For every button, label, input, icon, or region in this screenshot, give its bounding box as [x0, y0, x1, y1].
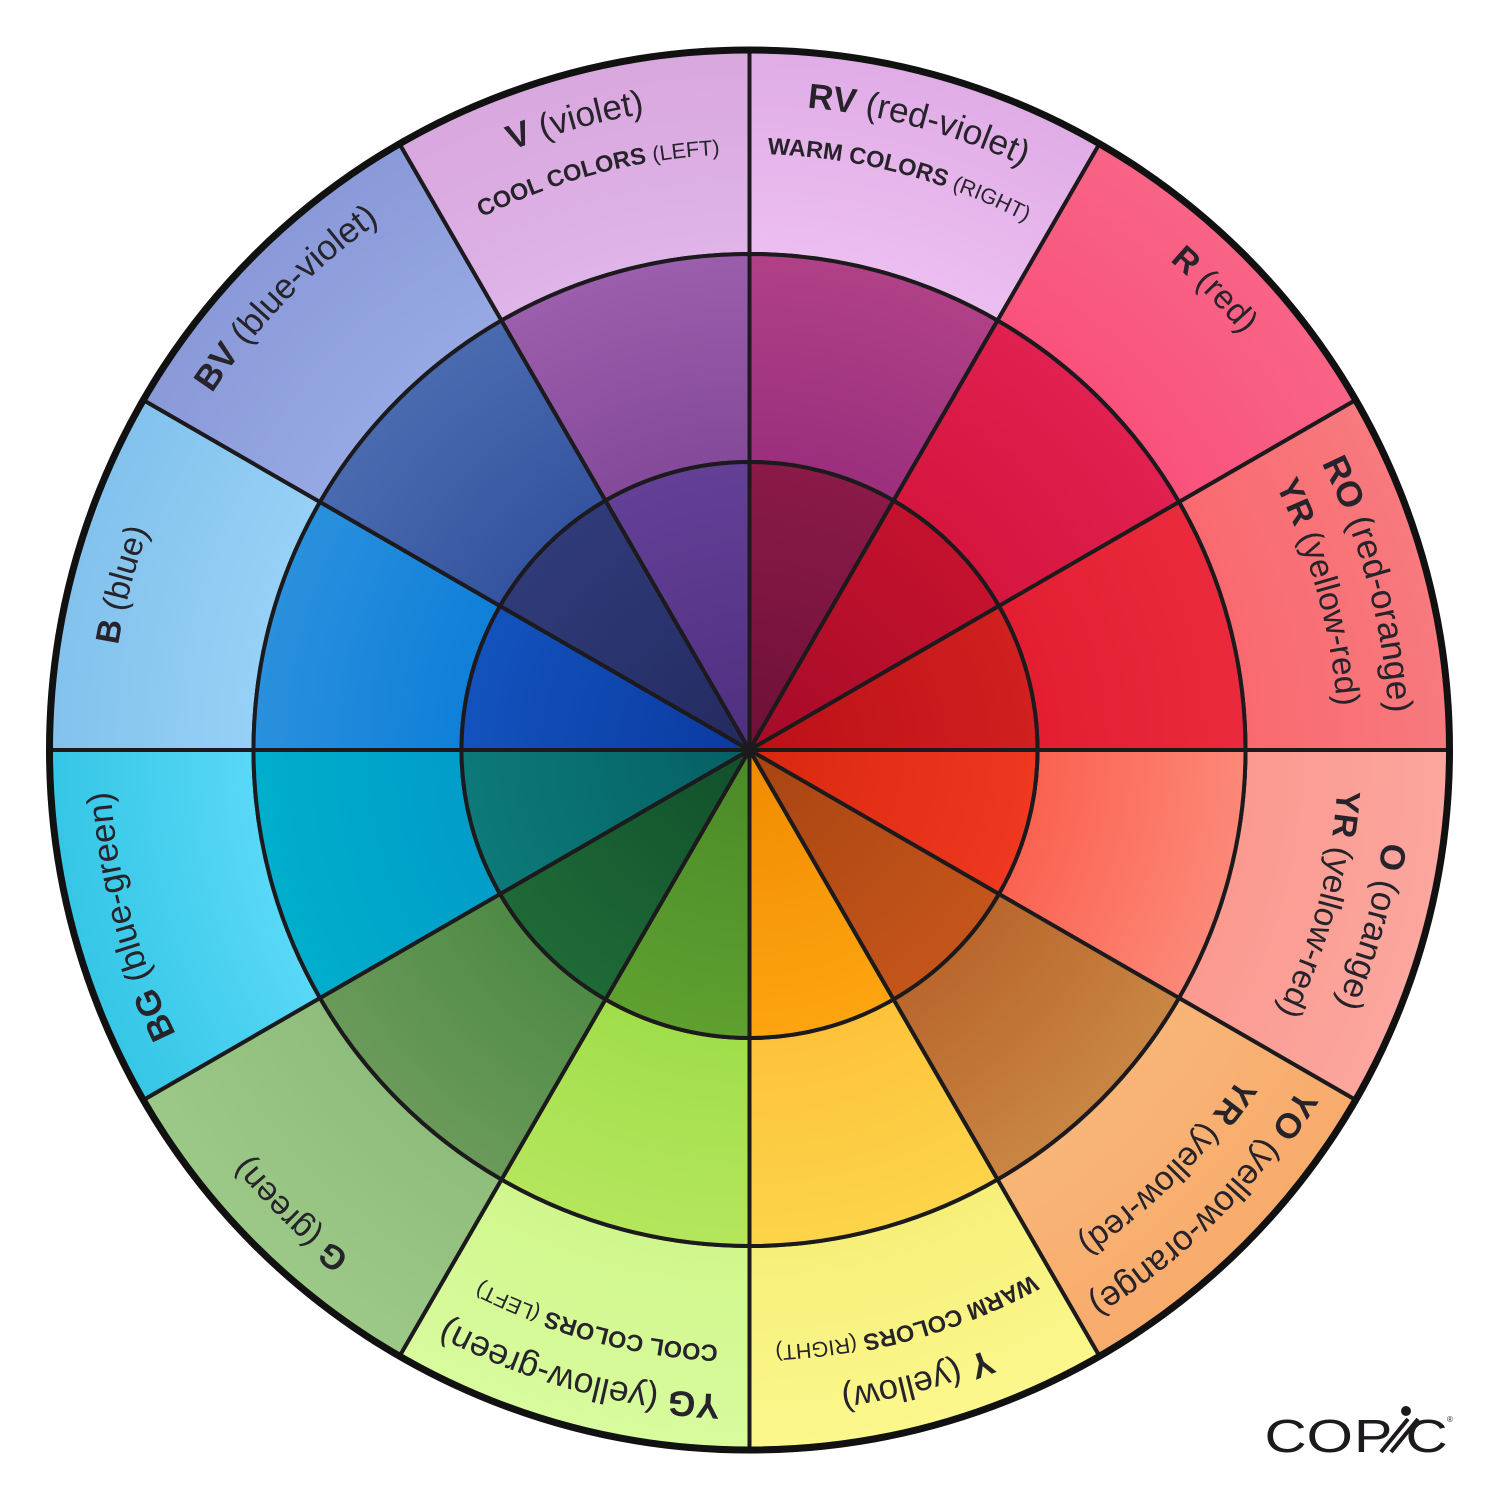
label: V (violet): V (violet): [504, 90, 642, 147]
label: G (green): G (green): [234, 1158, 345, 1270]
panel: B blue sector: [53, 404, 742, 748]
label: YR (yellow-red): YR (yellow-red): [1079, 1084, 1258, 1256]
panel: YO yellow-orange sector: [754, 752, 1354, 1352]
label: YO (yellow-orange): YO (yellow-orange): [1090, 1096, 1319, 1316]
label: cool colors left: COOL COLORS (LEFT): [477, 1280, 717, 1361]
panel: BG blue-green sector: [53, 752, 744, 1100]
panel: G green sector: [147, 755, 748, 1354]
label: RO (red-orange): RO (red-orange): [1322, 454, 1414, 710]
label: RV (red-violet): RV (red-violet): [809, 84, 1028, 169]
logo: COPIC: O: [1306, 1411, 1353, 1462]
label: B (blue): B (blue): [96, 528, 152, 643]
logo: COPIC: C: [1264, 1411, 1307, 1462]
logo: COPIC: ®: [1447, 1415, 1453, 1424]
panel: Y yellow sector: [752, 756, 1100, 1446]
label: R (red): R (red): [1172, 244, 1256, 334]
logo: COPIC: [1264, 1406, 1453, 1463]
label: BV (blue-violet): BV (blue-violet): [194, 206, 377, 392]
panel: O orange sector: [757, 752, 1446, 1096]
panel: YG yellow-green sector: [403, 758, 748, 1446]
label: warm colors right: WARM COLORS (RIGHT): [776, 1276, 1040, 1361]
label: Y (yellow): Y (yellow): [844, 1352, 997, 1412]
panel: V violet sector: [400, 54, 748, 744]
label: O (orange): O (orange): [1333, 845, 1406, 1008]
label: warm colors right: WARM COLORS (RIGHT): [768, 138, 1029, 224]
panel: RV red-violet sector: [752, 54, 1096, 742]
logo: COPIC: P: [1354, 1411, 1392, 1463]
logo: COPIC: C: [1406, 1411, 1448, 1462]
panel: RO red-orange sector: [755, 400, 1446, 748]
label: BG (blue-green): BG (blue-green): [86, 794, 175, 1042]
label: YG (yellow-green): YG (yellow-green): [441, 1316, 718, 1419]
label: cool colors left: COOL COLORS (LEFT): [478, 140, 718, 215]
panel: R red sector: [752, 146, 1352, 745]
label: YR (yellow-red): YR (yellow-red): [1274, 792, 1360, 1016]
panel: BV blue-violet sector: [146, 148, 744, 748]
label: YR (yellow-red): YR (yellow-red): [1280, 476, 1360, 704]
